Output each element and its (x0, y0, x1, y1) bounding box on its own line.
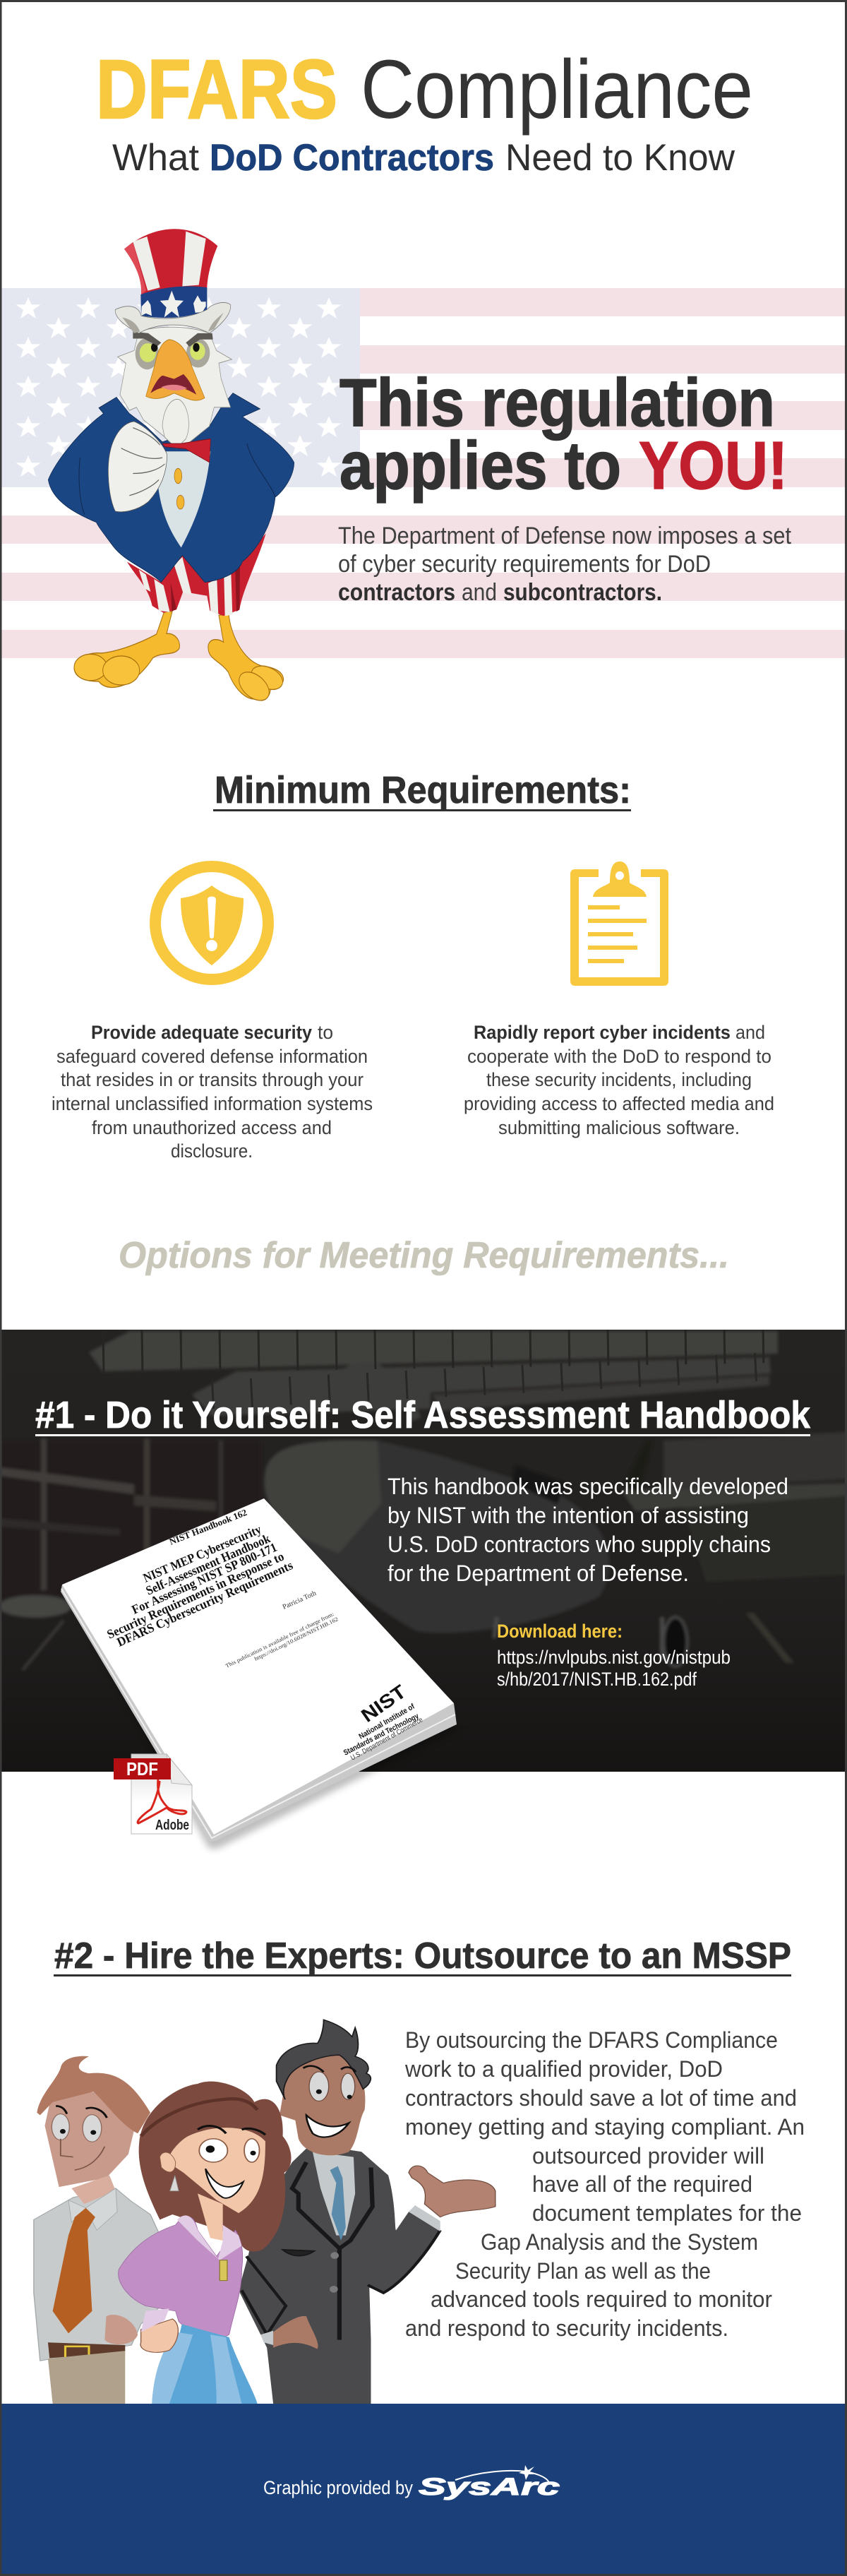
title (96, 43, 753, 136)
illustration: three cartoon business people (34, 2020, 495, 2404)
handbook cover document: Self-Assessment Handbook (144, 1531, 272, 1598)
handbook cover document: Patricia Toth (282, 1590, 318, 1611)
title: DFARS (96, 43, 337, 136)
handbook cover document: DFARS Cybersecurity Requirements (114, 1558, 295, 1650)
text block: outsourcing description: money getting and staying compliant. An (405, 2114, 805, 2140)
text block: outsourcing description (404, 2027, 805, 2341)
text block: outsourcing description: advanced tools required to monitor (431, 2286, 772, 2312)
text block: regulation description: and (462, 579, 497, 606)
text block: provide adequate security: to (318, 1022, 333, 1043)
subtitle: Need to Know (505, 137, 735, 179)
text block: handbook description: by NIST with the intention of assisting (388, 1503, 749, 1528)
handbook cover document: NIST MEP Cybersecurity (141, 1522, 263, 1585)
text block: provide adequate security: Provide adequate security (91, 1022, 312, 1043)
text block: provide adequate security: that resides in or transits through your (61, 1069, 364, 1090)
subtitle (112, 137, 735, 179)
panel: footer band (0, 2404, 847, 2576)
handbook cover document (61, 1498, 460, 1849)
text block: rapidly report cyber incidents: providing access to affected media and (464, 1093, 774, 1114)
text block: handbook description: This handbook was specifically developed (388, 1474, 788, 1499)
handbook cover document: Standards and Technology (342, 1712, 421, 1758)
handbook cover document: Security Requirements in Response to (104, 1549, 286, 1642)
text block: rapidly report cyber incidents (464, 1022, 774, 1138)
subtitle: DoD Contractors (210, 137, 494, 179)
handbook cover document: For Assessing NIST SP 800-171 (129, 1540, 279, 1617)
text block: provide adequate security: disclosure. (171, 1140, 253, 1162)
text block: download link: Download here: (497, 1621, 623, 1642)
heading: this regulation applies to you: YOU! (639, 428, 788, 503)
text block: outsourcing description: outsourced provider will (532, 2143, 764, 2169)
text block: regulation description: subcontractors. (503, 579, 662, 606)
text block: provide adequate security: internal unclassified information systems (52, 1093, 373, 1114)
text block: regulation description: The Department of Defense now imposes a set (338, 523, 791, 549)
text block: regulation description (338, 523, 791, 606)
handbook cover document: NIST (357, 1681, 410, 1727)
heading: hire the experts: #2 - Hire the Experts: Outsource to an MSSP (54, 1936, 791, 1976)
text block: outsourcing description: contractors should save a lot of time and (405, 2085, 797, 2111)
heading: this regulation applies to you: applies to (340, 428, 621, 503)
icon: PDF Adobe file: Adobe (155, 1818, 189, 1833)
person: man in dark suit (239, 2020, 495, 2404)
footer credit with SysArc logo (263, 2465, 560, 2500)
icon: shield with exclamation mark (155, 866, 268, 979)
icon: PDF Adobe file: PDF (126, 1758, 158, 1779)
heading: minimum requirements: Minimum Requirements: (215, 769, 631, 811)
text block: handbook description (388, 1474, 788, 1586)
text block: rapidly report cyber incidents: Rapidly report cyber incidents (474, 1022, 731, 1043)
subtitle: What (112, 137, 199, 179)
text block: download link (497, 1621, 731, 1690)
handbook cover document: National Institute of (357, 1703, 416, 1741)
title: Compliance (361, 43, 753, 136)
text block: outsourcing description: have all of the required (532, 2171, 752, 2197)
text block: download link: s/hb/2017/NIST.HB.162.pdf (497, 1669, 697, 1690)
text block: download link: https://nvlpubs.nist.gov/nistpub (497, 1647, 731, 1668)
text block: outsourcing description: By outsourcing the DFARS Compliance (405, 2027, 778, 2053)
text block: rapidly report cyber incidents: and (735, 1022, 765, 1043)
text block: provide adequate security: from unauthorized access and (92, 1117, 332, 1138)
text block: outsourcing description: document templates for the (532, 2200, 802, 2226)
text block: outsourcing description: Security Plan as well as the (455, 2258, 711, 2284)
handbook cover document: This publication is available free of charge from: (224, 1611, 335, 1669)
text block: outsourcing description: and respond to security incidents. (405, 2315, 728, 2341)
text block: provide adequate security (52, 1022, 373, 1162)
heading: options for meeting requirements: Options for Meeting Requirements... (119, 1235, 729, 1276)
footer credit with SysArc logo: SysArc (419, 2474, 560, 2500)
person: woman in purple sweater (119, 2082, 292, 2404)
handbook cover document: NIST Handbook 162 (168, 1507, 248, 1547)
text block: provide adequate security: safeguard covered defense information (56, 1046, 368, 1067)
footer credit with SysArc logo: Graphic provided by (263, 2477, 413, 2498)
text block: handbook description: U.S. DoD contractors who supply chains (388, 1532, 771, 1557)
text block: regulation description: contractors (338, 579, 455, 606)
text block: rapidly report cyber incidents: these security incidents, including (486, 1069, 752, 1090)
text block: rapidly report cyber incidents: cooperate with the DoD to respond to (467, 1046, 771, 1067)
text block: outsourcing description: Gap Analysis and the System (481, 2229, 758, 2255)
icon: PDF Adobe file (114, 1754, 192, 1834)
text block: handbook description: for the Department of Defense. (388, 1561, 689, 1586)
icon: Uncle Sam eagle mascot (48, 229, 294, 706)
handbook cover document: https://doi.org/10.6028/NIST.HB.162 (253, 1616, 340, 1662)
panel: hangar background photo (0, 1330, 847, 1772)
heading: this regulation applies to you: This regulation (340, 365, 775, 441)
text block: regulation description: of cyber security requirements for DoD (338, 551, 711, 578)
icon: clipboard (570, 861, 668, 986)
heading: this regulation applies to you (340, 365, 788, 503)
text block: rapidly report cyber incidents: submitting malicious software. (498, 1117, 740, 1138)
handbook cover document: U.S. Department of Commerce (349, 1716, 424, 1763)
text block: outsourcing description: work to a qualified provider, DoD (404, 2056, 723, 2082)
person: man in grey shirt (34, 2056, 176, 2404)
flag background (0, 288, 847, 658)
